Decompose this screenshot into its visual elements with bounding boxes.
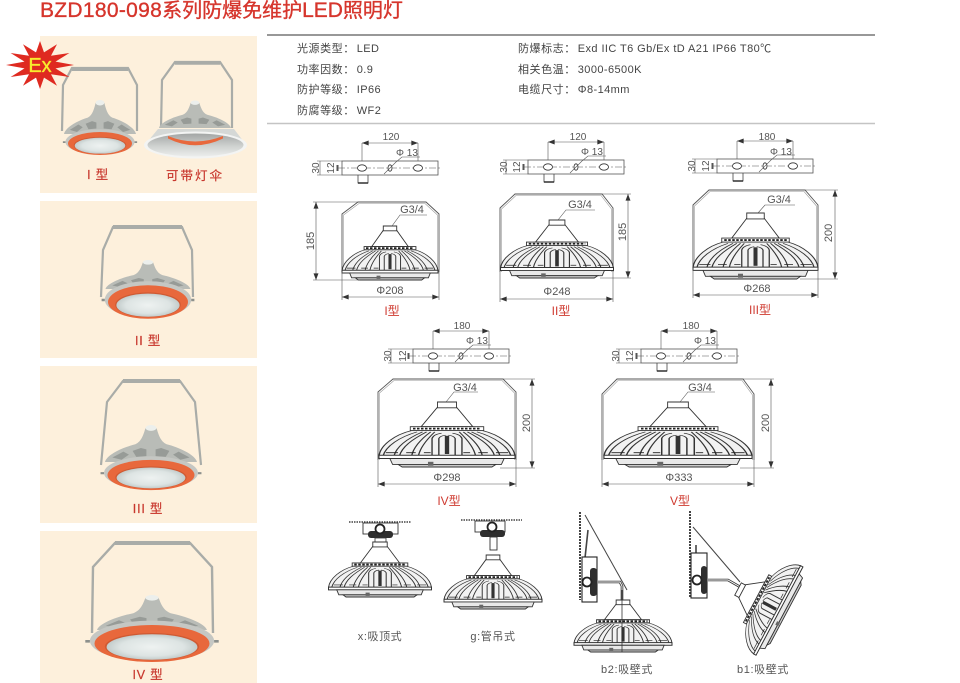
label: I type: I型 [384,304,400,318]
spec: corrosion grade: 防腐等级：WF2 [297,103,381,117]
spec: explosion mark: 防爆标志：Exd IIC T6 Gb/Ex tD A21 IP66 T80℃ [518,41,772,55]
mounting bar IV: 180 [454,321,471,332]
label: V type: V型 [670,494,690,508]
label: x ceiling mount: x:吸顶式 [358,630,402,643]
label: with reflector: 可带灯伞 [166,168,224,183]
mounting bar II [499,132,628,182]
dimension lines IV: Φ298 [433,472,461,484]
mounting bar IV: Φ 13 [466,336,488,347]
mounting bar I: 12 [326,162,337,174]
mounting bar II: 12 [512,161,523,173]
label: III type: III型 [749,303,771,317]
drawing: type IV dimensions [378,321,535,508]
mounting: wall b2 [574,512,672,676]
mounting: wall b1 [690,511,809,676]
label: g pendant mount: g:管吊式 [470,629,516,643]
photo: type IV lamp [85,543,219,662]
label: type IV: IV 型 [133,668,163,682]
label: type II: II 型 [135,334,161,348]
lamp outline III: G3/4 [767,194,791,206]
mounting bar I: 120 [383,132,400,143]
dimension lines II: 185 [617,223,629,241]
dimension lines I: Φ208 [376,285,404,297]
mounting: ceiling x [328,522,432,643]
lamp outline III [693,190,818,279]
label: type III: III 型 [133,502,163,516]
panel: type IV photo [40,531,257,683]
drawing: type III dimensions [687,132,838,317]
label: IV type: IV型 [437,494,461,508]
mounting bar V: 180 [683,321,700,332]
panel: type II photo [40,201,257,358]
dimension lines V [602,379,774,487]
dimension lines III: Φ268 [743,283,771,295]
photo: type I lamp [62,68,137,155]
mounting bar III [687,132,817,181]
mounting bar I: Φ 13 [396,148,418,159]
mounting bar V [611,321,741,371]
dimension lines IV [378,379,535,487]
label: II type: II型 [552,304,570,318]
panel: type I and reflector photo [40,36,257,193]
lamp outline IV: G3/4 [453,382,477,394]
lamp outline I [342,202,439,280]
mounting bar III: 12 [701,160,712,172]
photo: type II lamp [101,227,194,319]
mounting bar III: 30 [687,160,698,172]
label: b1 wall mount: b1:吸壁式 [737,662,789,676]
lamp outline II: G3/4 [568,199,592,211]
lamp outline V [602,379,754,467]
icon: Ex explosion badge: Ex [28,55,52,77]
icon: Ex explosion badge [6,41,74,89]
spec: power factor: 功率因数：0.9 [297,62,373,76]
mounting bar V: 30 [611,350,622,362]
mounting bar I: 30 [311,162,322,174]
lamp outline IV [378,379,516,467]
lamp outline II [500,194,614,278]
dimension lines V: Φ333 [665,472,693,484]
drawing: type V dimensions [602,321,774,508]
dimension lines I [305,202,439,300]
mounting bar II: 120 [570,132,587,143]
mounting bar II: Φ 13 [581,147,603,158]
dimension lines V: 200 [760,414,772,432]
lamp outline I: G3/4 [400,204,424,216]
spec: cable size: 电缆尺寸：Φ8-14mm [518,82,630,96]
dimension lines II [500,194,631,302]
panel: type III photo [40,366,257,523]
spec: protection grade: 防护等级：IP66 [297,82,381,96]
label: type I: I 型 [87,168,109,182]
mounting bar V: Φ 13 [694,336,716,347]
mounting bar IV: 30 [383,350,394,362]
mounting: pendant g [444,520,542,643]
mounting bar I [311,132,442,183]
dimension lines II: Φ248 [543,286,571,298]
mounting bar III: 180 [759,132,776,143]
mounting bar IV [383,321,513,371]
photo: type III lamp [101,381,201,490]
mounting bar V: 12 [625,350,636,362]
panel: specifications [267,35,875,124]
drawing: type II dimensions [499,132,631,318]
mounting bar II: 30 [499,161,510,173]
label: b2 wall mount: b2:吸壁式 [601,662,653,676]
spec: colour temperature: 相关色温：3000-6500K [518,62,642,76]
spec: light source: 光源类型：LED [297,41,379,55]
lamp outline V: G3/4 [688,382,712,394]
dimension lines IV: 200 [521,414,533,432]
photo: lamp with reflector [144,62,247,158]
drawing: type I dimensions [305,132,442,318]
mounting bar III: Φ 13 [770,147,792,158]
mounting bar IV: 12 [398,350,409,362]
dimension lines III: 200 [823,224,835,242]
dimension lines I: 185 [305,232,317,250]
dimension lines III [693,190,838,298]
